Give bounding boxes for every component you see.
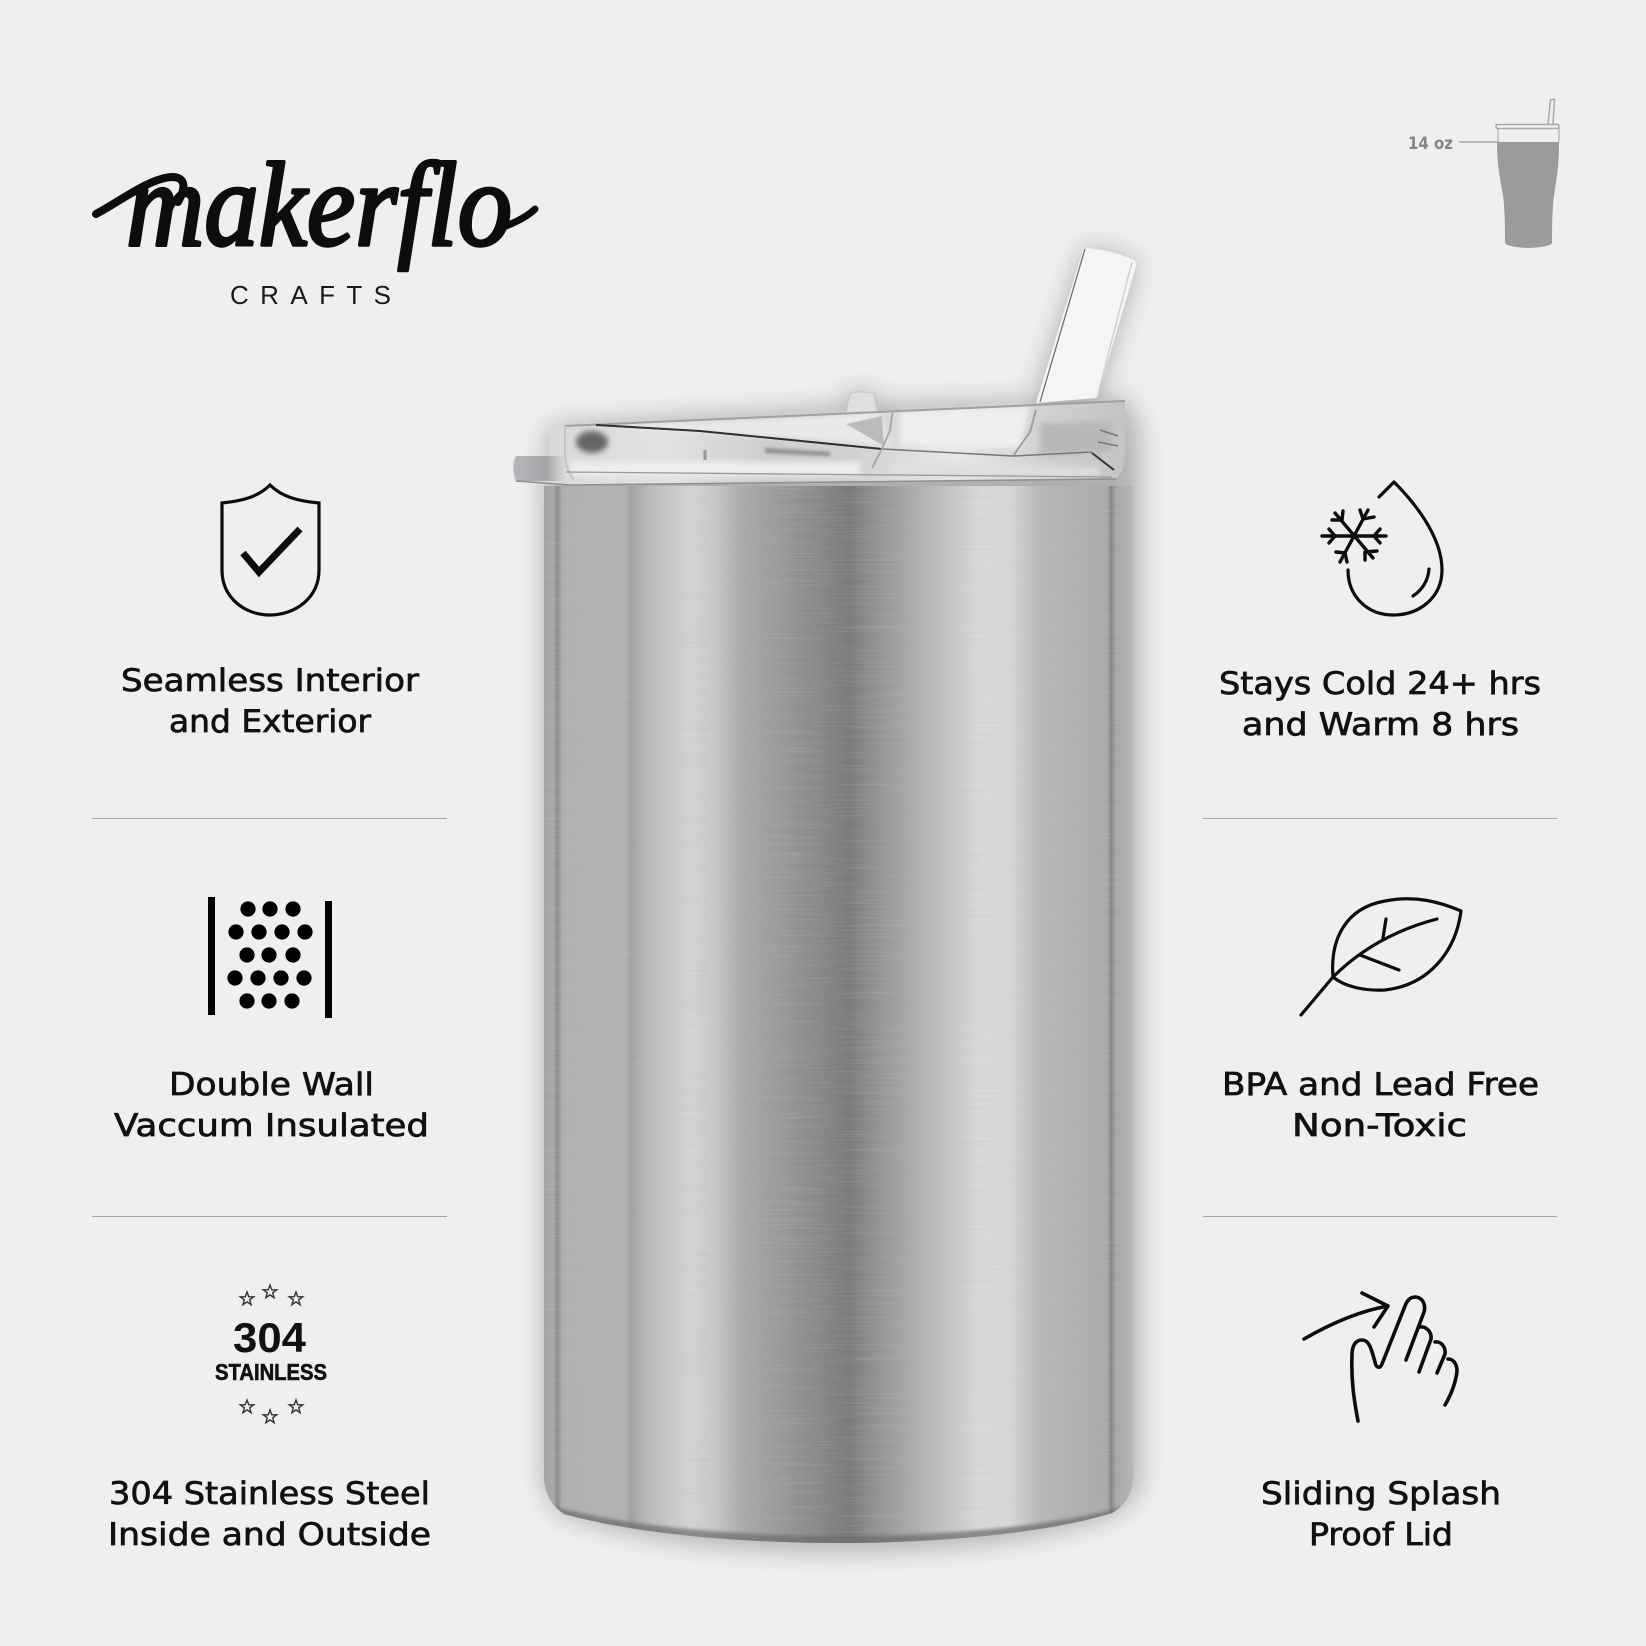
logo subtitle: CRAFTS (230, 280, 391, 310)
icon: leaf (1301, 899, 1461, 1015)
size tumbler icon (1496, 100, 1559, 248)
feature: 304 stainless steel (108, 1285, 431, 1553)
label: seamless (121, 663, 419, 740)
label: double wall: Vaccum Insulated (114, 1108, 429, 1144)
logo: makerflo crafts (96, 138, 535, 310)
straw (1036, 248, 1136, 403)
label: stays cold: and Warm 8 hrs (1242, 707, 1519, 743)
icon: snowflake and drop (1322, 482, 1442, 615)
lid (513, 392, 1125, 485)
tumbler body (542, 484, 1134, 1546)
icon: 304 stainless badge: 304 (233, 1314, 307, 1361)
icon: hand swipe with arrow (1304, 1293, 1457, 1421)
label: double wall: Double Wall (169, 1067, 374, 1103)
label: sliding lid (1261, 1476, 1501, 1553)
feature: sliding splash proof lid (1261, 1293, 1501, 1553)
label: BPA free (1222, 1067, 1539, 1144)
icon: double wall with dots (208, 897, 332, 1018)
feature: stays cold and warm (1219, 482, 1541, 743)
divider left 1 (92, 818, 447, 820)
size leader line (1459, 141, 1498, 143)
feature: seamless interior and exterior (121, 485, 419, 740)
divider left 2 (92, 1216, 447, 1218)
label: sliding lid: Sliding Splash (1261, 1476, 1501, 1512)
icon: 304 stainless badge (215, 1285, 327, 1423)
label: stays cold (1219, 666, 1541, 743)
tumbler shadow (544, 246, 1140, 1551)
label: 304 stainless: 304 Stainless Steel (109, 1476, 430, 1512)
feature: double wall vacuum insulated (114, 897, 429, 1144)
label: stays cold: Stays Cold 24+ hrs (1219, 666, 1541, 702)
size label: 14 oz (1408, 134, 1453, 154)
label: sliding lid: Proof Lid (1309, 1517, 1453, 1553)
label: 304 stainless: Inside and Outside (108, 1517, 431, 1553)
label: BPA free: BPA and Lead Free (1222, 1067, 1539, 1103)
logo script wordmark: makerflo (126, 138, 512, 271)
divider right 2 (1203, 1216, 1557, 1218)
icon: shield with check (222, 485, 319, 615)
label: seamless: and Exterior (169, 704, 371, 740)
label: 304 stainless (108, 1476, 431, 1553)
label: BPA free: Non-Toxic (1292, 1108, 1467, 1144)
size indicator: 14 oz (1408, 100, 1559, 248)
label: seamless: Seamless Interior (121, 663, 419, 699)
icon: 304 stainless badge: STAINLESS (215, 1359, 327, 1385)
feature: BPA and lead free (1222, 899, 1539, 1144)
label: double wall (114, 1067, 429, 1144)
product: tumbler (513, 246, 1140, 1551)
divider right 1 (1203, 818, 1557, 820)
